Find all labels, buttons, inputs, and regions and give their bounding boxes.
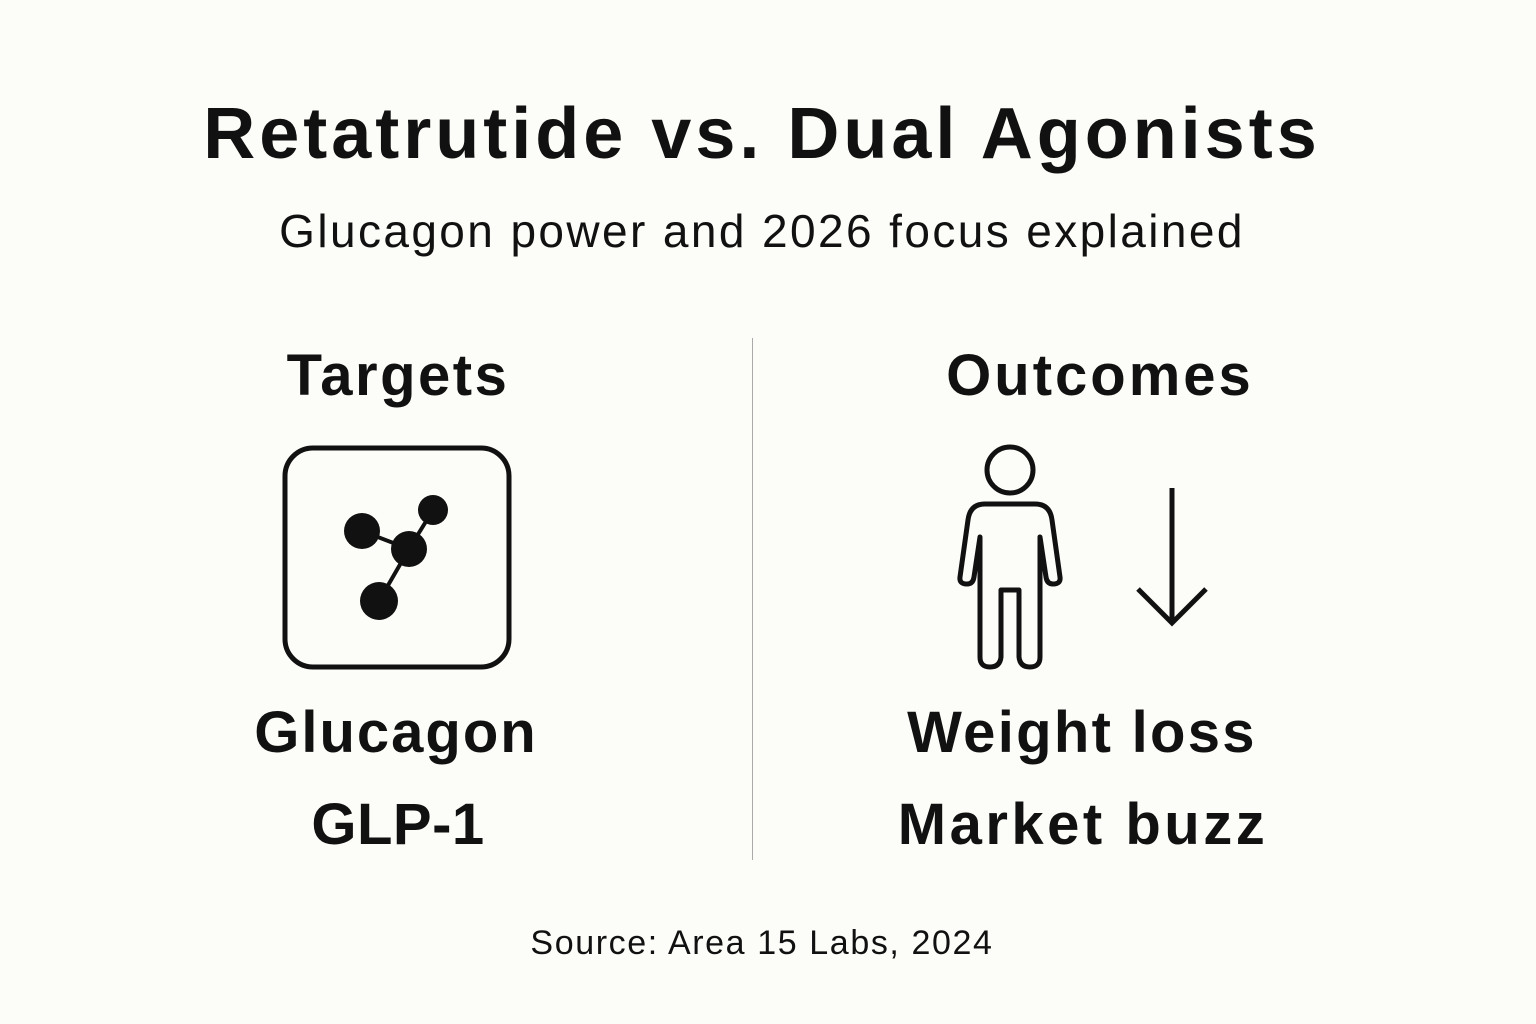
text: GLP-1: GLP-1 <box>311 792 485 857</box>
panel: outcomes <box>898 343 1268 857</box>
icon: person <box>957 444 1063 670</box>
subtitle: Glucagon power and 2026 focus explained <box>279 205 1245 257</box>
icon: down arrow <box>1136 488 1208 626</box>
text: glucagon: Glucagon <box>254 700 538 765</box>
heading: targets: Targets <box>287 343 509 408</box>
panel: targets <box>254 343 538 857</box>
text: market buzz: Market buzz <box>898 792 1268 857</box>
title: Retatrutide vs. Dual Agonists <box>203 94 1321 174</box>
source: Source: Area 15 Labs, 2024 <box>530 924 994 962</box>
text: weight loss: Weight loss <box>907 700 1257 765</box>
icon: molecule <box>282 446 512 670</box>
heading: outcomes: Outcomes <box>946 343 1254 408</box>
